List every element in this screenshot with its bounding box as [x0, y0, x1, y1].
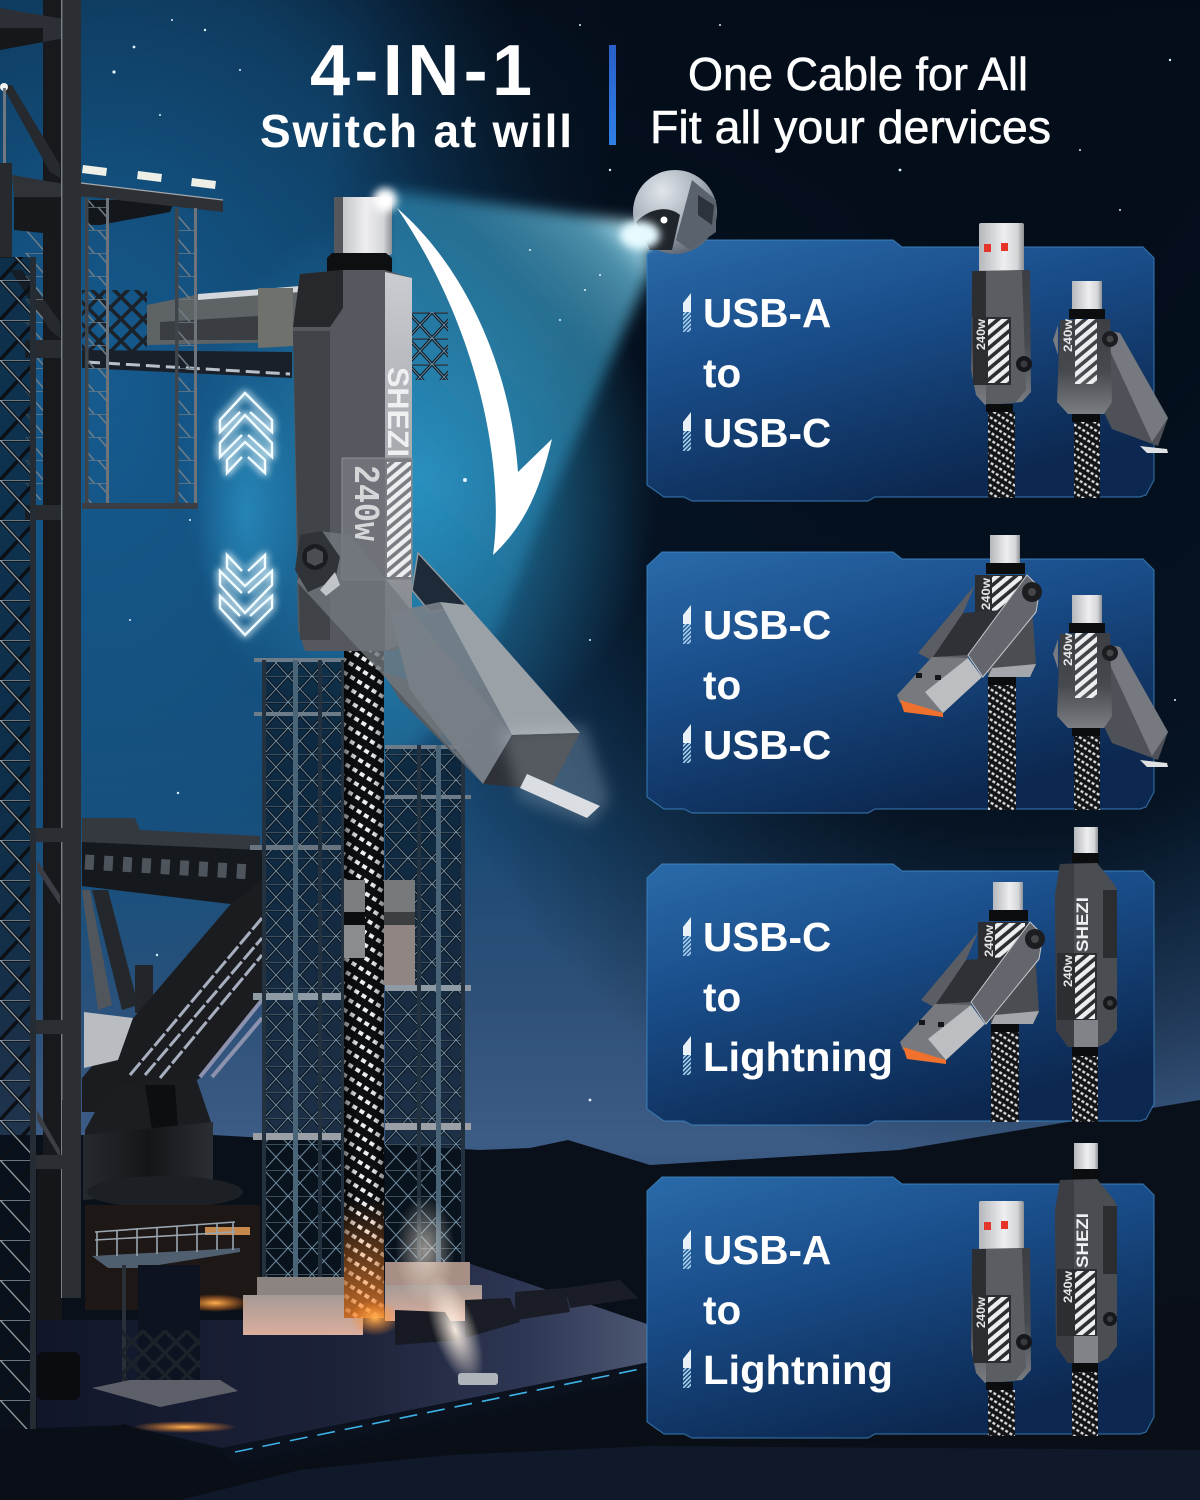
tagline line 1: One Cable for All [688, 48, 1028, 100]
panel 3 labels [683, 914, 893, 1080]
thruster modules [395, 1280, 638, 1345]
panel 4 labels: to [703, 1287, 741, 1333]
panel 2 labels [683, 602, 831, 768]
panel 2 fold connector with USB-A tip: 240w [979, 577, 993, 610]
panel 3 labels: USB-C [703, 914, 831, 960]
panel 2 USB-C connector [1053, 595, 1168, 810]
panel 4 Lightning connector [1055, 1143, 1117, 1436]
panel 3 fold connector with USB-A tip: 240w [982, 924, 996, 957]
braided cable [344, 650, 384, 1318]
panel 2 USB-C connector: 240w [1061, 632, 1075, 666]
panel 3: USB-C to Lightning [647, 827, 1154, 1125]
main connector: 4-in-1 swivel head [293, 188, 610, 825]
upper arm [82, 286, 448, 380]
panel 3 Lightning connector: 240w [1061, 954, 1075, 987]
background: dark upper right [320, 0, 1200, 1180]
panel 4 labels: USB-A [703, 1227, 831, 1273]
title block [260, 31, 1051, 157]
title: 4-IN-1: 4-IN-1 [310, 31, 532, 111]
foreground rocks highlight [180, 1446, 1200, 1500]
panel 2 labels: USB-C [703, 722, 831, 768]
front column [36, 0, 81, 1298]
ladder truss right [175, 208, 197, 506]
hex screw [295, 531, 340, 596]
concrete foot blocks [243, 1262, 482, 1335]
top deck with floodlights [81, 165, 223, 509]
lattice overlay [0, 257, 33, 1429]
panel 4 Lightning connector: 240w [1061, 1270, 1075, 1303]
panel 2: USB-C to USB-C [647, 535, 1168, 813]
panel 3 Lightning connector [1055, 827, 1117, 1122]
vertical struts under arm [82, 890, 153, 1013]
chevrons up icon [220, 393, 272, 473]
front truss [0, 257, 33, 1429]
240W label: 240w [344, 465, 385, 541]
light beam from helmet [350, 190, 650, 800]
chevron glow [196, 372, 296, 652]
panel 1: USB-A to USB-C [647, 223, 1168, 501]
background: glow behind connector [180, 200, 660, 760]
background: left sky glow [0, 0, 580, 1100]
panel 1 labels: USB-A [703, 290, 831, 336]
diagonal struts [82, 880, 262, 1112]
panel 2 fold connector with USB-A tip [897, 535, 1042, 810]
panel 1 USB-A connector [971, 223, 1032, 498]
panel 4 USB-A connector: 240w [974, 1296, 988, 1328]
panel 3 fold connector with USB-A tip [900, 882, 1045, 1122]
central lattice tower left [250, 658, 352, 1280]
panel 3 labels: Lightning [703, 1034, 893, 1080]
panel 4: USB-A to Lightning [647, 1143, 1154, 1438]
rotating base octagon and cylinder [62, 1078, 260, 1310]
ladder truss left [85, 198, 109, 503]
panel 4 USB-A connector [971, 1201, 1032, 1436]
panel 3 Lightning connector: SHEZI [1073, 897, 1092, 952]
ember glow at base [349, 1300, 401, 1336]
light jet on pad [395, 1195, 498, 1392]
astronaut helmet light [620, 170, 717, 254]
subtitle: Switch at will: Switch at will [260, 105, 572, 157]
panel 4 Lightning connector: SHEZI [1073, 1213, 1092, 1268]
panel 3 labels: to [703, 974, 741, 1020]
truss rail [30, 257, 36, 1429]
foreground rocks [0, 1300, 1200, 1500]
service platform [92, 1222, 240, 1407]
tagline line 2: Fit all your dervices [650, 101, 1051, 153]
SHEZI logo: SHEZI [381, 367, 414, 457]
divider bar [609, 45, 616, 145]
panel 1 labels: USB-C [703, 410, 831, 456]
gantry structure rear [0, 0, 81, 1320]
top lightning plug [327, 188, 397, 272]
panel 1 USB-C connector [1053, 281, 1168, 498]
swivel arm [297, 531, 610, 825]
panel 4 labels: Lightning [703, 1347, 893, 1393]
panel 1 labels [683, 290, 831, 456]
curved rotation arrow [397, 208, 552, 555]
stars [112, 19, 1176, 1101]
panel 1 USB-A connector: 240w [974, 318, 988, 350]
floodlights [82, 165, 216, 189]
orange light strips [133, 1227, 250, 1433]
left gantry tower [0, 0, 448, 1429]
launch platform [37, 1262, 650, 1464]
hills on horizon [0, 1100, 1200, 1500]
panel 2 labels: to [703, 662, 741, 708]
black octagon tank [37, 1352, 80, 1400]
panel 1 USB-C connector: 240w [1061, 318, 1075, 352]
panel 4 labels [683, 1227, 893, 1393]
cable clamps [344, 880, 415, 985]
panel 2 labels: USB-C [703, 602, 831, 648]
panel 1 labels: to [703, 350, 741, 396]
lower arm [82, 818, 262, 904]
central lattice tower right [385, 745, 473, 1270]
connector body [293, 270, 412, 651]
chevrons down icon [220, 555, 272, 635]
